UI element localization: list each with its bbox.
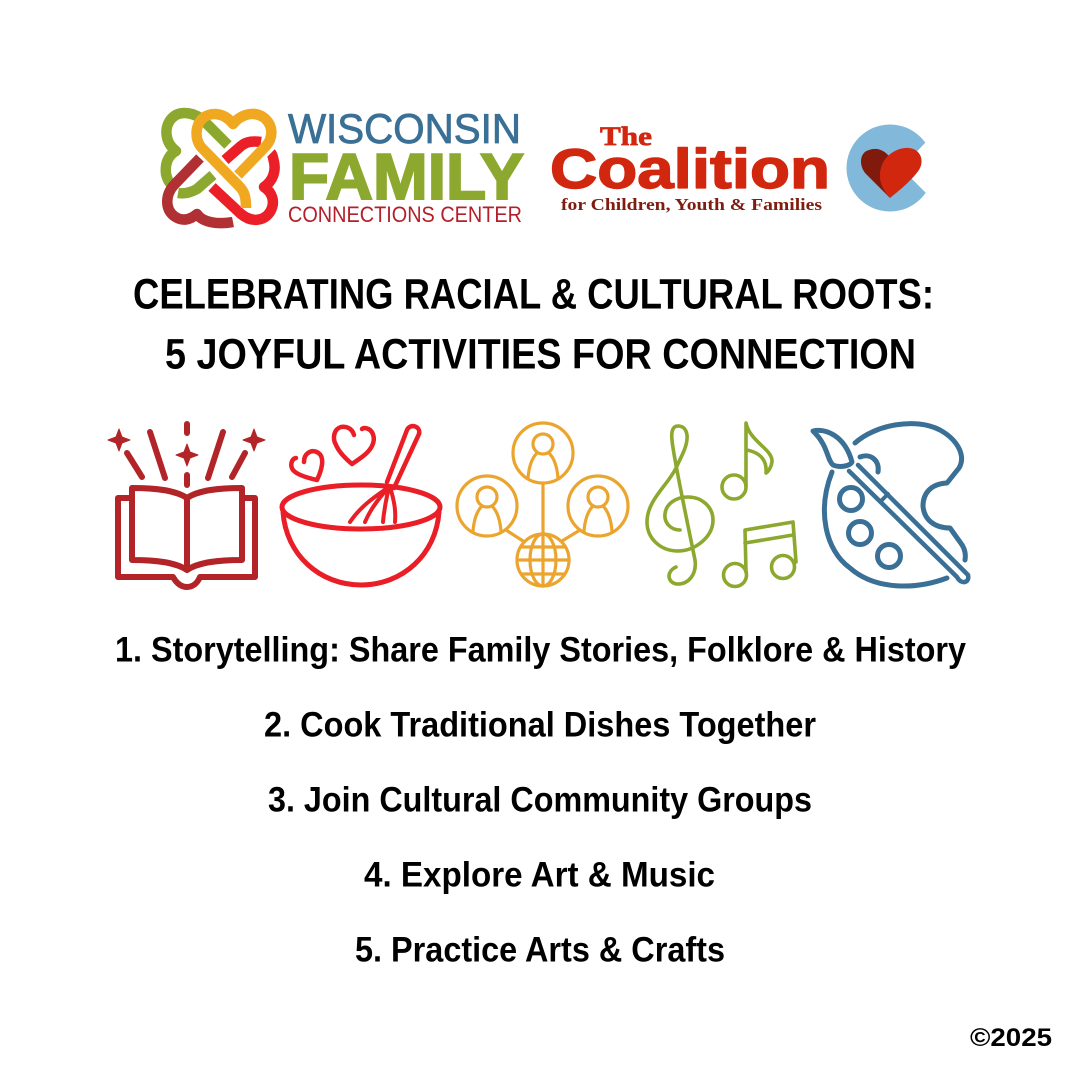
person left [457,476,517,536]
person right [568,476,628,536]
logo: Wisconsin Family Connections Center [166,105,524,227]
beamed notes [724,522,796,586]
wordmark: The: The [600,122,652,151]
icon: paint palette and brush [813,424,968,586]
wordmark: for Children, Youth & Families: for Children, Youth & Families [561,195,822,214]
wordmark: Wisconsin: WISCONSIN [288,105,521,152]
title [133,270,934,378]
logo: The Coalition [550,122,940,214]
icon: music notes [647,423,796,586]
globe [517,534,569,586]
title line 1: CELEBRATING RACIAL & CULTURAL ROOTS: [133,270,934,318]
treble clef [647,426,713,584]
icon: community people connected to globe [457,423,628,586]
icon: open book with sparkles [108,424,265,587]
item 3: 3. Join Cultural Community Groups [268,780,812,820]
icon: mixing bowl with whisk and hearts [282,426,440,585]
wordmark: Connections Center: CONNECTIONS CENTER [288,202,522,227]
person top [513,423,573,483]
wordmark: Family: FAMILY [289,140,524,213]
item 5: 5. Practice Arts & Crafts [355,930,725,970]
item 4: 4. Explore Art & Music [364,856,715,894]
copyright: ©2025 [970,1024,1052,1052]
item 1: 1. Storytelling: Share Family Stories, Folklore & History [115,630,966,670]
item 2: 2. Cook Traditional Dishes Together [264,706,816,744]
icon: interlaced heart knot [166,113,275,223]
wordmark: Coalition: Coalition [550,137,830,200]
title line 2: 5 JOYFUL ACTIVITIES FOR CONNECTION [165,330,916,378]
icon: C with heart [846,124,940,212]
activity list [115,630,966,970]
eighth note [722,423,772,499]
